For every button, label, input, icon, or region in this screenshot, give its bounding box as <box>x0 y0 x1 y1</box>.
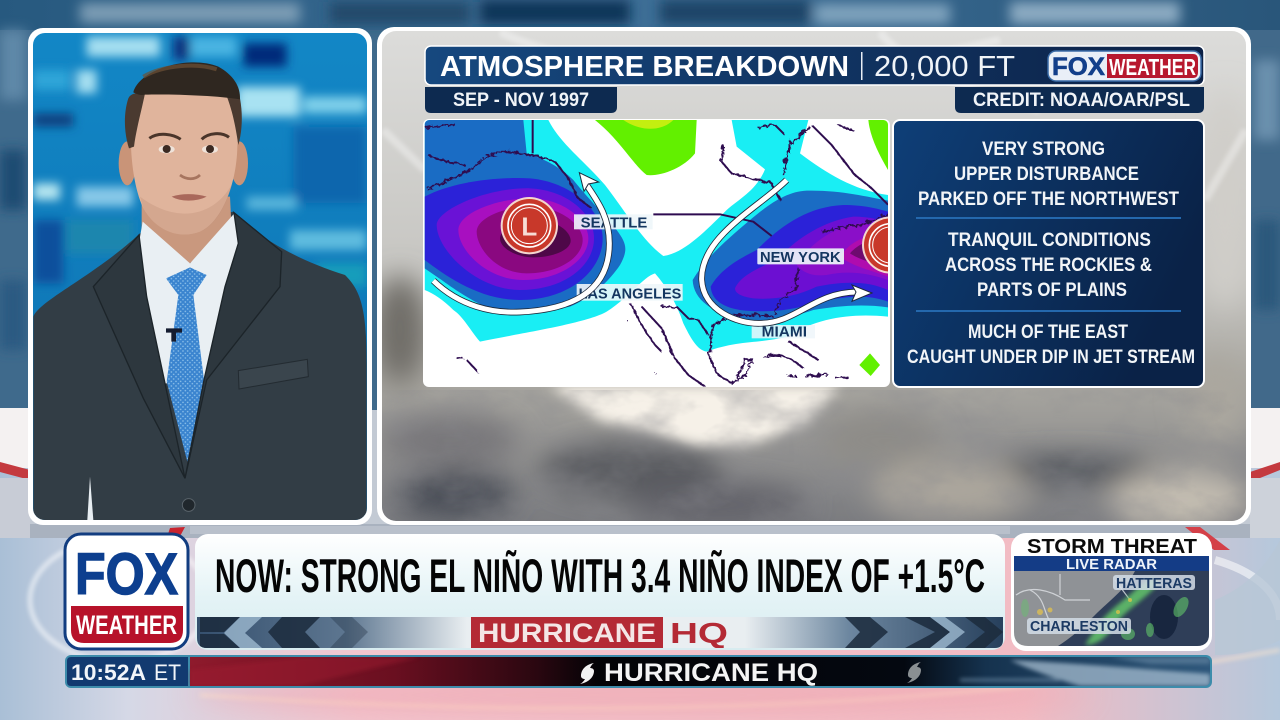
anomaly: green ridge <box>595 120 888 376</box>
panel: main graphic frame with cloudy sky <box>372 27 1251 530</box>
title bar <box>425 46 1204 85</box>
text block: eastern dip: CAUGHT UNDER DIP IN JET STREAM <box>907 347 1195 368</box>
live radar label: LIVE RADAR <box>1066 556 1157 573</box>
logo: fox weather small: WEATHER <box>1109 54 1196 80</box>
text block: upper disturbance <box>918 139 1179 210</box>
arrow: jet stream east <box>702 180 872 323</box>
logo: fox weather small: FOX <box>1052 53 1105 81</box>
radar label: Charleston: CHARLESTON <box>1030 619 1128 635</box>
shirt collar <box>138 213 238 383</box>
lapels <box>93 213 282 478</box>
text block: tranquil conditions: PARTS OF PLAINS <box>977 280 1127 301</box>
anomaly: steel blue layer west <box>425 120 625 311</box>
strip: hurricane hq banner: HURRICANE <box>478 618 656 648</box>
ticker bar <box>65 655 1212 688</box>
radar label: Hatteras: HATTERAS <box>1116 576 1192 592</box>
clock: 10:52A <box>71 660 146 685</box>
anomaly: cyan band <box>425 120 888 352</box>
logo: fox weather small <box>1048 51 1201 81</box>
ticker text: HURRICANE HQ <box>604 659 818 687</box>
anomaly: steel blue layer east <box>693 191 888 320</box>
radar map <box>1014 571 1209 646</box>
text block: eastern dip: MUCH OF THE EAST <box>968 322 1128 343</box>
text block: tranquil conditions: TRANQUIL CONDITIONS <box>948 230 1151 251</box>
text block: eastern dip <box>907 322 1195 368</box>
text block: upper disturbance: UPPER DISTURBANCE <box>954 164 1139 185</box>
studio backdrop <box>30 30 370 520</box>
tab: date range <box>425 87 617 113</box>
clock <box>67 657 188 686</box>
text block: upper disturbance: PARKED OFF THE NORTHWEST <box>918 189 1179 210</box>
altitude: 20,000 FT <box>874 51 1015 83</box>
strip: hurricane hq banner: HQ <box>670 618 728 650</box>
panel: presenter video <box>28 28 372 525</box>
city label: Seattle: SEATTLE <box>581 215 648 231</box>
city label: Miami <box>752 325 815 338</box>
head <box>119 62 248 235</box>
panel: storm threat radar <box>1011 533 1212 651</box>
jacket pocket and button <box>87 359 308 520</box>
clock: ET <box>154 660 181 685</box>
city label: Miami: MIAMI <box>762 325 807 341</box>
text block: tranquil conditions: ACROSS THE ROCKIES & <box>945 255 1152 276</box>
city label: New York: NEW YORK <box>760 250 841 266</box>
low pressure icon east <box>862 216 888 274</box>
map: coastlines and borders <box>425 120 888 385</box>
logo: fox weather <box>65 534 188 649</box>
strip: hurricane hq banner <box>197 617 1003 650</box>
panel: upper-level anomaly map <box>423 119 919 387</box>
tab: date range: SEP - NOV 1997 <box>453 90 589 111</box>
icon: hurricane faded <box>907 662 921 683</box>
text block: tranquil conditions <box>945 230 1152 301</box>
logo: fox weather: WEATHER <box>76 610 177 640</box>
arrow: jet stream west <box>433 173 609 312</box>
neck <box>142 197 232 268</box>
logo: fox weather: FOX <box>75 542 178 607</box>
map: white base <box>425 120 888 387</box>
low pressure icon west: L <box>521 211 537 241</box>
necktie <box>166 267 207 462</box>
suit jacket <box>33 212 367 520</box>
radar heading: STORM THREAT <box>1027 536 1197 558</box>
heading: atmosphere breakdown: ATMOSPHERE BREAKDOWN <box>440 51 849 83</box>
panel: analysis text <box>893 120 1204 387</box>
anomaly: west low rings <box>425 178 603 300</box>
text block: upper disturbance: VERY STRONG <box>982 139 1105 160</box>
anomaly: east trough rings <box>711 205 888 311</box>
panel: headline lower third <box>195 534 1005 650</box>
city label: Las Angeles: LAS ANGELES <box>579 286 682 302</box>
lapel microphone <box>166 328 182 342</box>
icon: hurricane <box>580 663 594 684</box>
tab: credit: CREDIT: NOAA/OAR/PSL <box>973 90 1190 111</box>
low pressure icon west <box>501 197 558 254</box>
